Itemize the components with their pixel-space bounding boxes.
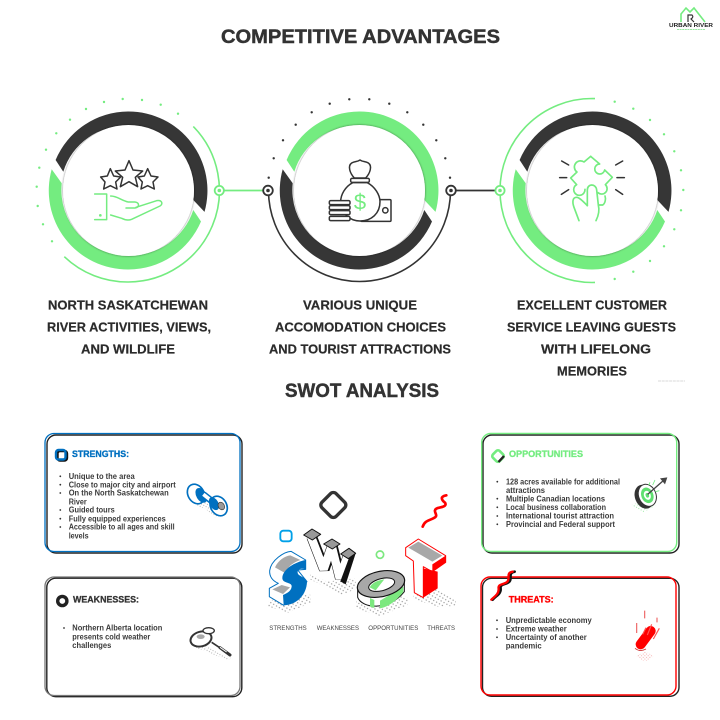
panel: advantage 1 circle [36, 98, 224, 282]
list: weaknesses: challenges [72, 641, 112, 650]
list: threats: Uncertainty of another [506, 633, 587, 642]
dotted arc [614, 100, 684, 280]
icon: target with arrow [631, 477, 667, 512]
text: advantage 1 caption: AND WILDLIFE [81, 342, 175, 356]
list: strengths: Accessible to all ages and skill [69, 523, 175, 532]
icon: hand holding puzzle piece [560, 156, 624, 221]
text: advantage 2 caption: VARIOUS UNIQUE [303, 298, 417, 312]
logo: Urban River [669, 8, 713, 30]
list: opportunities: Provincial and Federal support [506, 520, 615, 529]
outer thin arc [64, 126, 219, 282]
icon: magnifying glass [189, 628, 233, 660]
icon: dumbbell [184, 481, 231, 519]
connector: green line between first and second circles [224, 190, 263, 192]
list: opportunities [496, 477, 620, 529]
heading: weaknesses: WEAKNESSES: [73, 594, 139, 605]
shape: red squiggle [423, 495, 446, 527]
icon: money bag with coins and banknote [329, 160, 391, 221]
list: strengths [59, 472, 176, 540]
list: threats: Unpredictable economy [506, 616, 592, 625]
list: strengths: Unique to the area [69, 472, 135, 481]
list: threats: Extreme weather [506, 625, 567, 634]
list: strengths: levels [69, 531, 89, 540]
letter: O [355, 567, 407, 608]
icon: money bag with coins and banknote: $ [354, 189, 366, 214]
node left [263, 186, 273, 195]
text: advantage 3 caption: EXCELLENT CUSTOMER [517, 298, 667, 312]
ring: green lower arc [49, 169, 201, 270]
icon: threats squiggle [491, 572, 515, 600]
inner white disc [63, 125, 194, 256]
labels: SWOT legend: OPPORTUNITIES [368, 625, 419, 632]
icon: stars over open hand [95, 161, 162, 220]
heading: SWOT analysis: SWOT ANALYSIS [285, 381, 439, 402]
list: opportunities: Local business collaboration [506, 503, 606, 512]
labels: SWOT legend: WEAKNESSES [317, 625, 360, 632]
text: advantage 1 caption [47, 298, 211, 356]
text: advantage 2 caption: AND TOURIST ATTRACTIONS [269, 342, 451, 356]
illustration: SWOT isometric letters [268, 491, 456, 616]
panel: weaknesses [45, 577, 242, 697]
dotted floor shadows [268, 573, 456, 616]
letter: S [269, 551, 307, 605]
list: strengths: Guided tours [69, 506, 115, 515]
shape: green ring [376, 551, 384, 558]
inner white disc [527, 125, 658, 256]
icon: weaknesses marker [58, 596, 67, 606]
heading: opportunities: OPPORTUNITIES [509, 449, 583, 460]
node [215, 186, 224, 195]
labels: SWOT legend [269, 625, 456, 632]
icon: strengths marker [56, 450, 67, 460]
outer thin arc [268, 190, 450, 282]
letter: T [406, 539, 446, 598]
list: opportunities: 128 acres available for additional [506, 477, 620, 486]
ring: green lower arc [513, 169, 665, 270]
text: advantage 2 caption [269, 298, 451, 356]
dotted arc [268, 98, 451, 179]
list: weaknesses: presents cold weather [72, 632, 150, 641]
list: weaknesses [63, 624, 162, 650]
inner white disc [294, 125, 425, 256]
text: advantage 3 caption: SERVICE LEAVING GUESTS [507, 320, 676, 334]
node [495, 186, 505, 195]
panel: advantage 2 circle [263, 98, 456, 282]
ring: green upper arc [287, 112, 438, 212]
letter: W [304, 529, 356, 584]
text: advantage 3 caption: MEMORIES [557, 364, 627, 378]
list: opportunities: attractions [506, 486, 546, 495]
icon: opportunities marker [491, 449, 505, 463]
list: strengths: River [69, 497, 87, 506]
list: opportunities: Multiple Canadian locations [506, 494, 606, 503]
list: opportunities: International tourist attraction [506, 512, 614, 521]
dotted arc [36, 98, 179, 242]
heading: strengths: STRENGTHS: [72, 449, 129, 460]
panel: opportunities [482, 434, 679, 553]
list: strengths: Fully equipped experiences [69, 514, 166, 523]
text: advantage 3 caption [507, 298, 676, 378]
outer thin arc [500, 98, 595, 282]
list: threats: pandemic [506, 642, 542, 651]
title: competitive advantages: COMPETITIVE ADVANTAGES [221, 27, 500, 48]
panel: advantage 3 circle [495, 98, 684, 282]
ring: dark lower arc [280, 169, 432, 270]
ring: dark upper arc [56, 112, 207, 212]
text: advantage 1 caption: RIVER ACTIVITIES, VIEWS, [47, 320, 211, 334]
labels: SWOT legend: THREATS [427, 625, 456, 632]
logo: Urban River: URBAN RIVER [669, 23, 713, 29]
text: advantage 2 caption: ACCOMODATION CHOICES [275, 320, 446, 334]
shape: blue rounded square [280, 531, 292, 541]
list: strengths: On the North Saskatchewan [69, 489, 169, 498]
ring: dark upper arc [520, 112, 671, 212]
panel: threats [481, 572, 679, 696]
connector: dark line between second and third circles [456, 190, 496, 192]
shape: rounded diamond [319, 491, 347, 519]
text: advantage 1 caption: NORTH SASKATCHEWAN [48, 298, 208, 312]
text: advantage 3 caption: WITH LIFELONG [541, 342, 651, 356]
icon: falling object [635, 611, 659, 662]
list: weaknesses: Northern Alberta location [72, 624, 162, 633]
node right [446, 186, 456, 195]
panel: strengths [45, 434, 242, 553]
heading: threats: THREATS: [509, 594, 554, 605]
list: threats [496, 616, 592, 651]
list: strengths: Close to major city and airport [69, 480, 176, 489]
labels: SWOT legend: STRENGTHS [269, 625, 307, 632]
